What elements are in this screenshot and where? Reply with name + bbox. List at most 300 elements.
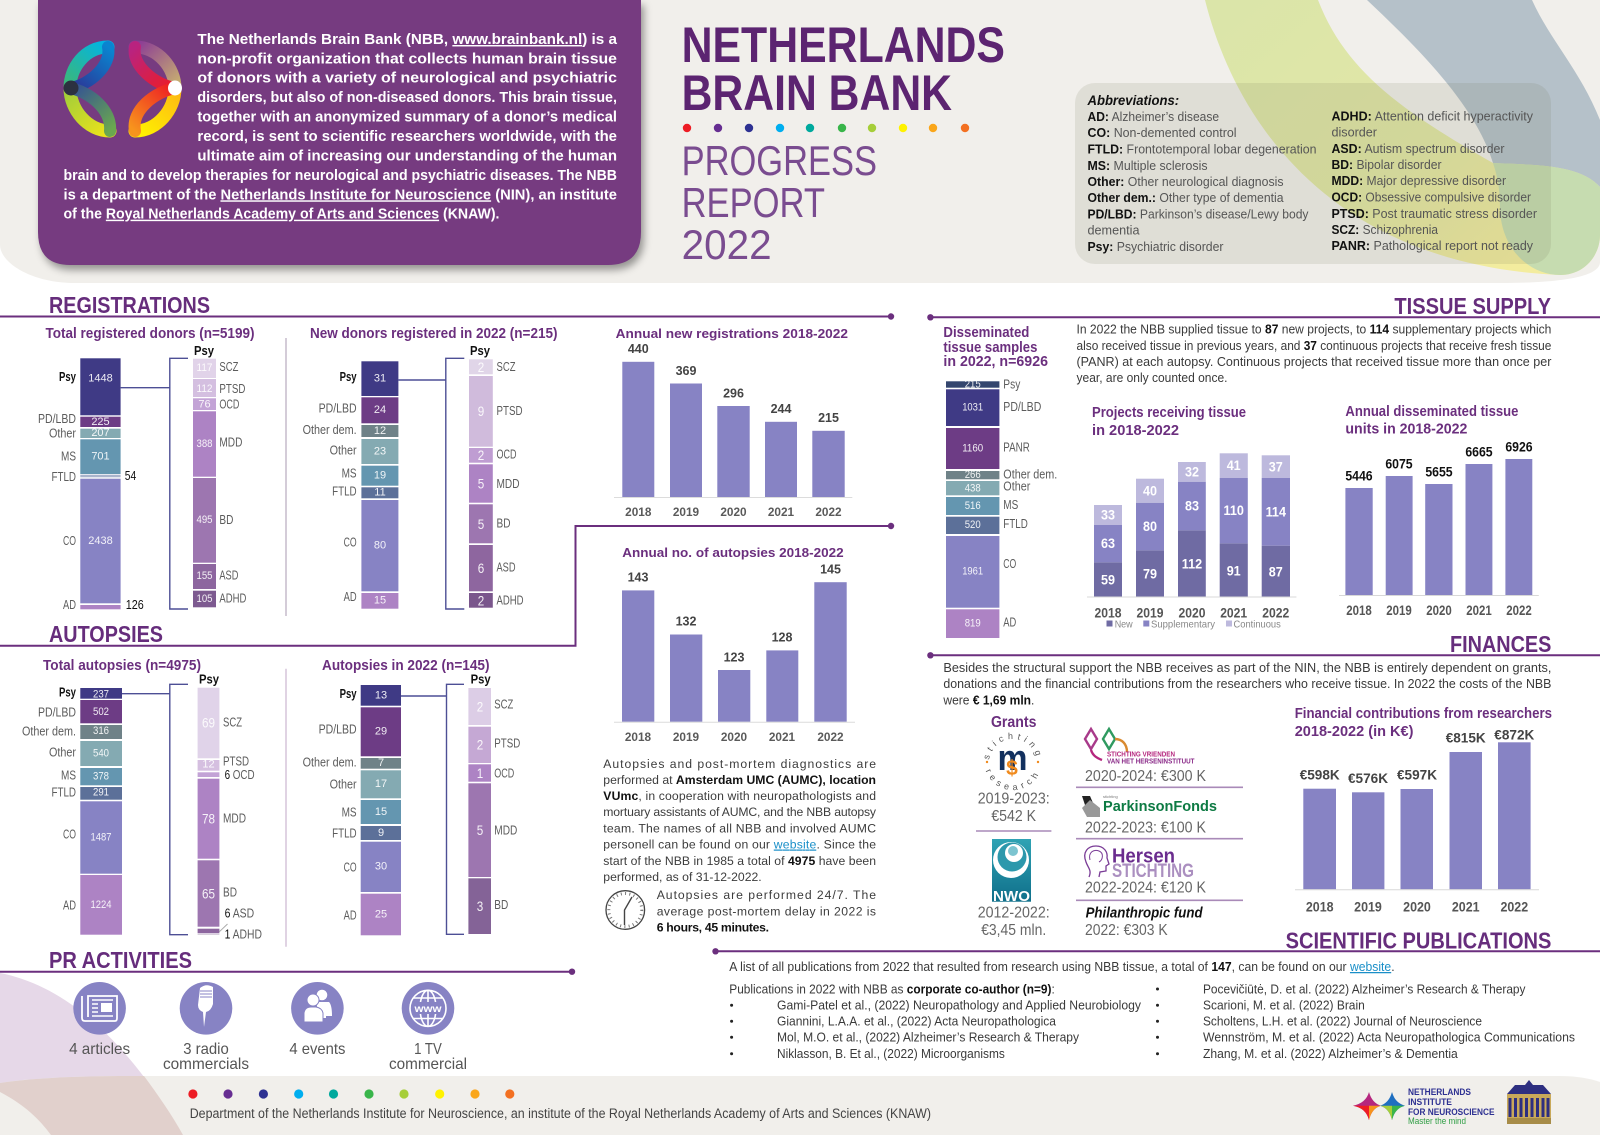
header background bbox=[0, 0, 1600, 283]
chart: autopsies in 2022: MDD bbox=[494, 823, 517, 837]
chart: annual new registrations: 2021 bbox=[768, 505, 795, 519]
icon: ParkinsonFonds logo bbox=[1082, 794, 1217, 817]
text: publications list: Niklasson, B. Et al., (2022) Microorganisms bbox=[777, 1047, 1005, 1061]
chart: total autopsies: 291 bbox=[93, 786, 109, 798]
panel: abbreviations: dementia bbox=[1088, 222, 1140, 238]
panel: abbreviations: Abbreviations: bbox=[1087, 92, 1179, 108]
grants: left column: €3,45 mln. bbox=[981, 922, 1046, 939]
chart: autopsies in 2022: 2 bbox=[477, 699, 483, 715]
chart: financial contributions from researchers bbox=[1295, 706, 1552, 914]
chart: total registered donors: 155 bbox=[196, 570, 212, 582]
text: introduction paragraph: disorders, but also of non-diseased donors. This brain tissue, bbox=[197, 90, 617, 106]
chart: projects receiving tissue: 80 bbox=[1143, 518, 1157, 534]
title: 2022 bbox=[682, 221, 772, 268]
chart: total autopsies: Other bbox=[49, 746, 76, 760]
chart: total registered donors: SCZ bbox=[219, 360, 239, 374]
chart: new donors registered in 2022: OCD bbox=[496, 448, 516, 462]
chart: total autopsies: FTLD bbox=[52, 785, 76, 799]
legend: Supplementary bbox=[1151, 618, 1216, 630]
chart: annual new registrations: 369 bbox=[676, 364, 696, 378]
chart: total registered donors: 1448 bbox=[88, 373, 113, 385]
panel: abbreviations: PD/LBD: Parkinson’s disease/Lewy body bbox=[1088, 206, 1309, 222]
chart: total autopsies: 502 bbox=[93, 706, 109, 718]
chart: annual new registrations: 2019 bbox=[673, 505, 700, 519]
chart: new donors registered in 2022: 2 bbox=[478, 359, 484, 375]
chart: financial contributions from researchers: 2018-2022 (in K€) bbox=[1295, 724, 1414, 740]
heading: finances: FINANCES bbox=[1450, 631, 1551, 657]
chart: total registered donors: 126 bbox=[126, 598, 144, 612]
chart: projects receiving tissue: 59 bbox=[1101, 571, 1115, 587]
chart: financial contributions from researchers: 2019 bbox=[1354, 898, 1382, 914]
chart: total registered donors: MS bbox=[61, 450, 76, 464]
text: publications list: Scarioni, M. et al. (2022) Brain bbox=[1203, 999, 1365, 1013]
chart: disseminated tissue samples: 819 bbox=[965, 617, 981, 629]
chart: disseminated tissue samples: PANR bbox=[1003, 441, 1030, 455]
icon: NWO logo bbox=[992, 839, 1031, 905]
chart: annual new registrations: 215 bbox=[818, 411, 839, 425]
icon: brain logo bbox=[64, 47, 182, 131]
chart: projects receiving tissue: 2020 bbox=[1178, 605, 1206, 621]
text: publications list bbox=[729, 960, 1575, 1061]
text: tissue supply paragraph: (PANR) at each autopsy. Continuous projects that received tissue more than once per bbox=[1076, 355, 1551, 369]
chart: new donors registered in 2022: 5 bbox=[478, 516, 484, 532]
chart: annual number of autopsies: 2019 bbox=[673, 730, 700, 744]
chart: projects receiving tissue: 110 bbox=[1224, 502, 1244, 518]
chart: new donors registered in 2022: MS bbox=[342, 466, 357, 480]
panel: abbreviations: Other dem.: Other type of dementia bbox=[1088, 190, 1284, 205]
chart: new donors registered in 2022: PD/LBD bbox=[319, 401, 357, 415]
chart: total autopsies: PD/LBD bbox=[38, 705, 76, 719]
chart: autopsies in 2022: Autopsies in 2022 (n=145) bbox=[322, 658, 490, 674]
chart: annual new registrations: 2022 bbox=[815, 505, 842, 519]
icon: KNAW building bbox=[1507, 1080, 1551, 1124]
chart: disseminated tissue samples: in 2022, n=6926 bbox=[943, 354, 1048, 370]
chart: new donors registered in 2022: 6 bbox=[478, 560, 484, 576]
chart: disseminated tissue samples: MS bbox=[1003, 498, 1018, 512]
chart: disseminated tissue samples bbox=[943, 325, 1057, 638]
icon: stichting MS research logo: stichting bbox=[984, 732, 1040, 760]
chart: financial contributions from researchers: €872K bbox=[1494, 727, 1534, 743]
text: autopsy paragraph: performed, as of 31-12-2022. bbox=[603, 870, 762, 884]
grants: left column: 2012-2022: bbox=[978, 904, 1050, 922]
chart: total registered donors: FTLD bbox=[52, 470, 76, 484]
chart: autopsies in 2022: PD/LBD bbox=[319, 723, 357, 737]
chart: total registered donors: ADHD bbox=[219, 592, 246, 606]
chart: annual disseminated tissue units: 6665 bbox=[1465, 444, 1493, 460]
chart: new donors registered in 2022: 31 bbox=[374, 373, 386, 385]
heading: scientific publications: SCIENTIFIC PUBLICATIONS bbox=[1286, 927, 1551, 953]
chart: total registered donors: 495 bbox=[196, 514, 212, 526]
text: introduction paragraph bbox=[64, 32, 618, 223]
chart: total registered donors: Total registered donors (n=5199) bbox=[46, 326, 255, 342]
text: tissue supply paragraph bbox=[1076, 322, 1551, 385]
text: publications list: Zhang, M. et al. (2022) Alzheimer’s & Dementia bbox=[1203, 1047, 1458, 1061]
heading: registrations: REGISTRATIONS bbox=[49, 292, 210, 318]
text: autopsy paragraph bbox=[603, 757, 877, 884]
chart: autopsies in 2022: CO bbox=[344, 861, 357, 875]
text: finances paragraph bbox=[942, 661, 1551, 708]
chart: autopsies in 2022: 5 bbox=[477, 822, 483, 838]
chart: disseminated tissue samples: FTLD bbox=[1003, 517, 1028, 531]
chart: annual new registrations: 2018 bbox=[625, 505, 652, 519]
text: introduction paragraph: The Netherlands Brain Bank (NBB, www.brainbank.nl ) is a bbox=[197, 32, 618, 48]
icon: Stichting Vrienden logo: VAN HET HERSENINSTITUUT bbox=[1107, 756, 1195, 766]
text: publications list: Mol, M.O. et al., (2022) Alzheimer’s Research & Therapy bbox=[777, 1031, 1080, 1045]
icon: globe www, 1 TV commercial bbox=[389, 982, 467, 1073]
chart: disseminated tissue samples: 516 bbox=[965, 500, 981, 512]
coloured dots bbox=[683, 124, 969, 132]
panel: abbreviations: disorder bbox=[1332, 124, 1378, 140]
chart: new donors registered in 2022: SCZ bbox=[496, 360, 516, 374]
icon: microphone, 3 radio commercials: commercials bbox=[163, 1056, 249, 1073]
chart: projects receiving tissue bbox=[1087, 405, 1296, 630]
chart: autopsies in 2022: 7 bbox=[378, 757, 384, 769]
chart: autopsies in 2022: BD bbox=[494, 898, 508, 912]
panel: abbreviations: Psy: Psychiatric disorder bbox=[1088, 239, 1224, 254]
chart: annual disseminated tissue units: 2018 bbox=[1346, 602, 1372, 618]
chart: new donors registered in 2022: MDD bbox=[496, 477, 520, 491]
text: introduction paragraph: brain and to develop therapies for neurological and psychiatric diseases. The NBB bbox=[64, 168, 617, 184]
chart: financial contributions from researchers: €815K bbox=[1446, 730, 1486, 746]
chart: total autopsies: 378 bbox=[93, 770, 109, 782]
chart: autopsies in 2022: 25 bbox=[375, 909, 387, 921]
chart: autopsies in 2022: Psy bbox=[340, 687, 357, 701]
text: introduction paragraph: of the Royal Netherlands Academy of Arts and Sciences (KNAW). bbox=[64, 207, 500, 223]
chart: total registered donors: Psy bbox=[194, 344, 214, 358]
icon: Hersenstichting logo: STICHTING bbox=[1112, 861, 1194, 882]
chart: autopsies in 2022: 17 bbox=[375, 778, 387, 790]
title: BRAIN BANK bbox=[682, 65, 952, 121]
chart: total registered donors: Other bbox=[49, 427, 76, 441]
chart: autopsies in 2022: 30 bbox=[375, 861, 387, 873]
panel: abbreviations: SCZ: Schizophrenia bbox=[1332, 222, 1439, 237]
text: publications list: Pocevičiūtė, D. et al. (2022) Alzheimer’s Research & Therapy bbox=[1203, 982, 1526, 996]
chart: new donors registered in 2022: 12 bbox=[374, 425, 386, 437]
chart: total registered donors: ASD bbox=[219, 569, 238, 583]
chart: autopsies in 2022: MS bbox=[342, 806, 357, 820]
chart: projects receiving tissue: 112 bbox=[1182, 556, 1202, 572]
chart: annual new registrations: Annual new registrations 2018-2022 bbox=[616, 326, 848, 341]
chart: annual number of autopsies bbox=[614, 545, 855, 744]
icon: Hersenstichting logo: Hersen bbox=[1112, 846, 1175, 868]
chart: projects receiving tissue: Projects receiving tissue bbox=[1092, 405, 1246, 421]
grants: right column: 2022: €303 K bbox=[1085, 922, 1168, 939]
chart: total registered donors: 117 bbox=[196, 362, 212, 374]
text: autopsy paragraph: Autopsies and post-mortem diagnostics are bbox=[603, 757, 876, 771]
logo: Netherlands Institute for Neuroscience: FOR NEUROSCIENCE bbox=[1408, 1107, 1494, 1118]
text: introduction paragraph: of donors with a variety of neurological and psychiatric bbox=[197, 71, 617, 87]
chart: autopsies in 2022: SCZ bbox=[494, 698, 514, 712]
heading: PR activities: PR ACTIVITIES bbox=[49, 947, 192, 973]
chart: total registered donors: 225 bbox=[91, 416, 110, 428]
chart: total registered donors: 54 bbox=[125, 469, 136, 483]
text: finances paragraph: were € 1,69 mln. bbox=[942, 694, 1034, 708]
chart: total autopsies: Total autopsies (n=4975) bbox=[43, 658, 201, 674]
chart: new donors registered in 2022: 5 bbox=[478, 476, 484, 492]
grants: right column: 2022-2024: €120 K bbox=[1085, 880, 1206, 896]
chart: disseminated tissue samples: 438 bbox=[965, 482, 981, 494]
chart: total autopsies: 65 bbox=[202, 886, 215, 902]
chart: total autopsies: 237 bbox=[93, 688, 109, 700]
panel: abbreviations: ADHD: Attention deficit hyperactivity bbox=[1332, 108, 1533, 124]
chart: annual disseminated tissue units: 2021 bbox=[1466, 602, 1492, 618]
grants: left column: Grants bbox=[991, 714, 1036, 731]
chart: projects receiving tissue: 2022 bbox=[1262, 605, 1289, 621]
text: tissue supply paragraph: In 2022 the NBB supplied tissue to 87 new projects, to 114 supplementary projects which bbox=[1076, 322, 1551, 336]
chart: total autopsies bbox=[22, 658, 262, 942]
icon: NWO logo: NWO bbox=[993, 889, 1030, 905]
chart: total autopsies: MDD bbox=[223, 811, 246, 825]
chart: new donors registered in 2022: ASD bbox=[496, 561, 516, 575]
chart: projects receiving tissue: in 2018-2022 bbox=[1092, 423, 1179, 439]
chart: financial contributions from researchers: €598K bbox=[1300, 766, 1340, 782]
icon: newspaper, 4 articles bbox=[69, 982, 130, 1058]
chart: annual disseminated tissue units bbox=[1339, 404, 1539, 618]
legend: Continuous bbox=[1234, 618, 1281, 630]
chart: total registered donors: PD/LBD bbox=[38, 412, 76, 426]
chart: total registered donors: 388 bbox=[196, 438, 212, 450]
chart: financial contributions from researchers: 2018 bbox=[1306, 898, 1334, 914]
chart: new donors registered in 2022: Other dem. bbox=[303, 423, 357, 437]
heading: autopsies: AUTOPSIES bbox=[49, 621, 163, 647]
chart: total autopsies: Psy bbox=[199, 673, 219, 687]
chart: new donors registered in 2022: 2 bbox=[478, 592, 484, 608]
chart: total autopsies: 1 ADHD bbox=[225, 928, 262, 942]
chart: disseminated tissue samples: PD/LBD bbox=[1003, 400, 1041, 414]
text: post-mortem delay: average post-mortem delay in 2022 is bbox=[657, 904, 876, 918]
title: REPORT bbox=[682, 179, 825, 226]
chart: total registered donors: MDD bbox=[219, 436, 242, 450]
chart: disseminated tissue samples: tissue samples bbox=[943, 340, 1037, 356]
chart: projects receiving tissue: 40 bbox=[1143, 482, 1157, 498]
chart: new donors registered in 2022: 23 bbox=[374, 445, 386, 457]
chart: projects receiving tissue: 41 bbox=[1227, 457, 1241, 473]
icon: globe www, 1 TV commercial: commercial bbox=[389, 1056, 467, 1073]
chart: autopsies in 2022 bbox=[303, 658, 520, 935]
grants: right column: 2020-2024: €300 K bbox=[1085, 768, 1206, 785]
icon: Stichting Vrienden logo bbox=[1085, 729, 1195, 766]
chart: total registered donors: PTSD bbox=[219, 382, 245, 396]
chart: total autopsies: 1487 bbox=[90, 831, 112, 843]
chart: annual disseminated tissue units: 5655 bbox=[1425, 464, 1453, 480]
chart: projects receiving tissue: 87 bbox=[1269, 563, 1283, 579]
chart: new donors registered in 2022: Other bbox=[330, 444, 357, 458]
chart: autopsies in 2022: 13 bbox=[375, 689, 387, 701]
text: introduction paragraph: is a department of the Netherlands Institute for Neuroscience (NIN), an institute bbox=[64, 187, 617, 203]
chart: annual new registrations bbox=[614, 326, 852, 519]
chart: total registered donors: BD bbox=[219, 513, 233, 527]
text: introduction paragraph: record, is sent to scientific researchers worldwide, with the bbox=[197, 129, 617, 145]
chart: new donors registered in 2022: 2 bbox=[478, 447, 484, 463]
chart: total autopsies: SCZ bbox=[223, 716, 242, 730]
panel: abbreviations: OCD: Obsessive compulsive disorder bbox=[1332, 190, 1532, 204]
chart: annual disseminated tissue units: 2020 bbox=[1426, 602, 1452, 618]
chart: disseminated tissue samples: Other dem. bbox=[1003, 467, 1057, 481]
chart: total registered donors: 112 bbox=[196, 383, 212, 395]
text: tissue supply paragraph: also received tissue in previous years, and 37 continuous projects that receive fresh tissue bbox=[1076, 339, 1551, 353]
chart: total autopsies: 316 bbox=[93, 725, 109, 737]
chart: annual new registrations: 296 bbox=[723, 386, 744, 400]
chart: annual disseminated tissue units: 2019 bbox=[1386, 602, 1412, 618]
chart: annual number of autopsies: 123 bbox=[724, 650, 744, 664]
chart: total registered donors: 701 bbox=[91, 451, 110, 463]
chart: total autopsies: 69 bbox=[202, 715, 215, 731]
chart: disseminated tissue samples: Other bbox=[1003, 479, 1030, 493]
chart: new donors registered in 2022: FTLD bbox=[332, 485, 357, 499]
chart: disseminated tissue samples: 520 bbox=[965, 519, 981, 531]
chart: annual number of autopsies: 145 bbox=[820, 563, 841, 577]
legend: New bbox=[1115, 618, 1133, 630]
chart: autopsies in 2022: Other dem. bbox=[303, 756, 357, 770]
heading: finances bbox=[927, 631, 1600, 658]
chart: new donors registered in 2022: 9 bbox=[478, 403, 484, 419]
heading: tissue supply: TISSUE SUPPLY bbox=[1394, 293, 1551, 319]
text: autopsy paragraph: start of the NBB in 1985 a total of 4975 have been bbox=[603, 854, 876, 868]
icon: globe www, 1 TV commercial: 1 TV bbox=[414, 1041, 442, 1058]
chart: new donors registered in 2022: 24 bbox=[374, 404, 386, 416]
chart: autopsies in 2022: OCD bbox=[494, 767, 514, 781]
chart: autopsies in 2022: 9 bbox=[378, 827, 384, 839]
panel: abbreviations bbox=[1075, 83, 1551, 264]
chart: annual new registrations: 440 bbox=[628, 342, 649, 356]
chart: disseminated tissue samples: 1031 bbox=[962, 402, 983, 414]
chart: total registered donors: 2438 bbox=[88, 535, 113, 547]
icon: ParkinsonFonds logo: stichting bbox=[1103, 794, 1118, 799]
chart: total autopsies: MS bbox=[61, 769, 76, 783]
heading: scientific publications bbox=[712, 927, 1600, 954]
grants: left column: €542 K bbox=[991, 808, 1036, 825]
chart: autopsies in 2022: FTLD bbox=[332, 826, 357, 840]
chart: annual number of autopsies: 132 bbox=[676, 614, 696, 628]
chart: new donors registered in 2022: 80 bbox=[374, 540, 386, 552]
chart: annual new registrations: 2020 bbox=[720, 505, 747, 519]
chart: new donors registered in 2022: CO bbox=[344, 536, 357, 550]
chart: total autopsies: 12 bbox=[202, 758, 215, 770]
chart: annual disseminated tissue units: 2022 bbox=[1506, 602, 1532, 618]
chart: financial contributions from researchers: Financial contributions from researchers bbox=[1295, 706, 1552, 722]
legend bbox=[1106, 618, 1281, 630]
chart: new donors registered in 2022: 19 bbox=[374, 469, 386, 481]
icon: microphone, 3 radio commercials: 3 radio bbox=[183, 1041, 229, 1058]
panel: abbreviations: FTLD: Frontotemporal lobar degeneration bbox=[1088, 142, 1316, 156]
chart: new donors registered in 2022: 15 bbox=[374, 595, 386, 607]
text: autopsy paragraph: mortuary assistants of AUMC, and the NBB autopsy bbox=[603, 805, 877, 819]
chart: annual number of autopsies: 2022 bbox=[817, 730, 844, 744]
heading: autopsies bbox=[0, 523, 894, 647]
chart: projects receiving tissue: 32 bbox=[1185, 464, 1199, 480]
icon: people, 4 events: 4 events bbox=[289, 1041, 345, 1058]
text: publications list: Publications in 2022 with NBB as corporate co-author (n=9): bbox=[729, 982, 1055, 996]
grants: right column: 2022-2023: €100 K bbox=[1085, 820, 1206, 836]
chart: annual number of autopsies: 2018 bbox=[625, 730, 652, 744]
chart: projects receiving tissue: 2019 bbox=[1136, 605, 1164, 621]
chart: autopsies in 2022: AD bbox=[344, 909, 357, 923]
heading: PR activities bbox=[0, 947, 575, 975]
chart: total autopsies: AD bbox=[63, 898, 76, 912]
chart: annual number of autopsies: 128 bbox=[772, 630, 792, 644]
chart: autopsies in 2022: Other bbox=[330, 778, 357, 792]
chart: new donors registered in 2022: Psy bbox=[470, 344, 490, 358]
panel: abbreviations: MS: Multiple sclerosis bbox=[1088, 158, 1208, 173]
text: autopsy paragraph: performed at Amsterdam UMC (AUMC), location bbox=[603, 773, 876, 787]
chart: financial contributions from researchers: €576K bbox=[1348, 770, 1388, 786]
icon: ParkinsonFonds logo: ParkinsonFonds bbox=[1103, 799, 1217, 815]
chart: autopsies in 2022: 2 bbox=[477, 736, 483, 752]
heading: tissue supply bbox=[927, 293, 1600, 320]
chart: total autopsies: BD bbox=[223, 885, 237, 899]
chart: new donors registered in 2022 bbox=[303, 326, 558, 609]
title: NETHERLANDS bbox=[682, 17, 1005, 73]
chart: projects receiving tissue: 114 bbox=[1266, 503, 1286, 519]
chart: new donors registered in 2022: ADHD bbox=[496, 594, 524, 608]
text: introduction paragraph: non-profit organization that collects human brain tissue bbox=[197, 51, 617, 67]
icon: Stichting Vrienden logo: STICHTING VRIENDEN bbox=[1107, 750, 1175, 758]
chart: total autopsies: Psy bbox=[59, 686, 76, 700]
chart: disseminated tissue samples: 215 bbox=[965, 379, 981, 391]
chart: total registered donors: 105 bbox=[196, 593, 212, 605]
chart: annual disseminated tissue units: units in 2018-2022 bbox=[1345, 421, 1467, 437]
title: PROGRESS bbox=[682, 137, 877, 184]
chart: annual number of autopsies: 2021 bbox=[769, 730, 796, 744]
chart: disseminated tissue samples: 1160 bbox=[962, 442, 983, 454]
chart: projects receiving tissue: 2021 bbox=[1220, 605, 1247, 621]
text: publications list: Gami-Patel et al., (2022) Neuropathology and Applied Neurobiology bbox=[777, 999, 1142, 1013]
text: introduction paragraph: ultimate aim of increasing our understanding of the human bbox=[197, 148, 617, 164]
chart: annual disseminated tissue units: 5446 bbox=[1345, 468, 1373, 484]
chart: disseminated tissue samples: 266 bbox=[965, 469, 981, 481]
chart: projects receiving tissue: 91 bbox=[1227, 562, 1241, 578]
panel: introduction bbox=[38, 0, 641, 265]
chart: total registered donors: Psy bbox=[59, 370, 76, 384]
logo: Netherlands Institute for Neuroscience: INSTITUTE bbox=[1408, 1097, 1452, 1108]
text: post-mortem delay: Autopsies are performed 24/7. The bbox=[657, 888, 876, 902]
icon: stichting MS research logo: research bbox=[986, 769, 1038, 790]
chart: financial contributions from researchers: 2022 bbox=[1500, 898, 1528, 914]
footer: coloured dots bbox=[188, 1089, 514, 1099]
text: post-mortem delay bbox=[657, 888, 876, 934]
chart: disseminated tissue samples: 1961 bbox=[962, 566, 983, 578]
icon: people, 4 events bbox=[289, 982, 345, 1058]
icon: globe www, 1 TV commercial: www bbox=[413, 1003, 442, 1015]
chart: disseminated tissue samples: Psy bbox=[1003, 377, 1021, 391]
chart: total autopsies: CO bbox=[63, 827, 76, 841]
chart: autopsies in 2022: Psy bbox=[471, 673, 491, 687]
chart: total registered donors: AD bbox=[63, 598, 76, 612]
text: autopsy paragraph: VUmc, in cooperation with neuropathologists and bbox=[603, 789, 876, 803]
footer background bbox=[0, 973, 1600, 1135]
chart: new donors registered in 2022: BD bbox=[496, 517, 510, 531]
text: finances paragraph: Besides the structural support the NBB receives as part of the NIN, the NBB is entirely dependent on grants, bbox=[943, 661, 1551, 675]
panel: abbreviations: CO: Non-demented control bbox=[1088, 125, 1237, 140]
panel: abbreviations: BD: Bipolar disorder bbox=[1332, 157, 1442, 172]
logo: Netherlands Institute for Neuroscience: Master the mind bbox=[1408, 1116, 1466, 1127]
text: autopsy paragraph: team. The names of all NBB and involved AUMC bbox=[603, 822, 876, 836]
text: introduction paragraph: together with an anonymized summary of a donor’s medical bbox=[197, 110, 617, 126]
chart: projects receiving tissue: 33 bbox=[1101, 507, 1115, 523]
chart: annual disseminated tissue units: 6926 bbox=[1505, 439, 1533, 455]
icon: microphone, 3 radio commercials bbox=[163, 982, 249, 1073]
chart: total autopsies: 6 ASD bbox=[225, 906, 254, 920]
chart: financial contributions from researchers: €597K bbox=[1397, 767, 1437, 783]
icon: Hersenstichting logo bbox=[1085, 846, 1194, 882]
logo: Netherlands Institute for Neuroscience bbox=[1353, 1087, 1494, 1127]
title bbox=[682, 17, 1005, 268]
grants: left column: 2019-2023: bbox=[978, 790, 1050, 808]
panel: abbreviations: PANR: Pathological report not ready bbox=[1332, 238, 1533, 253]
chart: total registered donors: 76 bbox=[198, 398, 211, 410]
icon: stichting MS research logo: $ bbox=[1006, 757, 1018, 780]
text: post-mortem delay: 6 hours, 45 minutes. bbox=[657, 920, 769, 934]
